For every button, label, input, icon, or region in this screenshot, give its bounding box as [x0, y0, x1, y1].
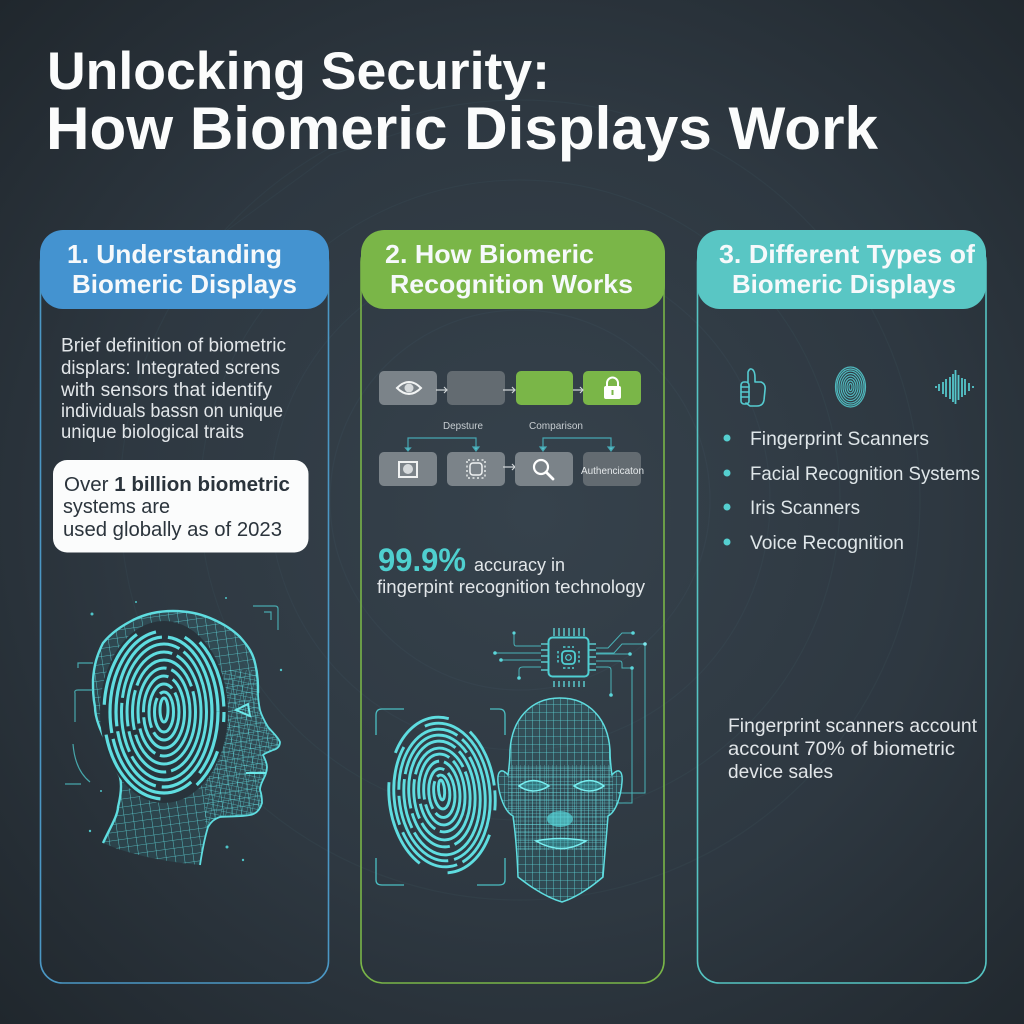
panel 1 definition text: individuals bassn on unique: [61, 401, 283, 422]
teal connectors: [406, 438, 614, 451]
stat: fingerprint scanners share: Fingerprint scanners account: [728, 715, 978, 737]
panel 1 definition text: unique biological traits: [61, 422, 244, 443]
box: camera: [379, 452, 437, 486]
panel 1 definition text: displars: Integrated screns: [61, 358, 280, 379]
head fingerprint rings: [104, 625, 224, 799]
panel 1 definition text: Brief definition of biometric: [61, 336, 286, 356]
panel 1 header: 1. Understanding: [67, 239, 282, 269]
illustration: head profile with fingerprint: [65, 597, 290, 870]
flow diagram: [379, 371, 644, 486]
title: Unlocking Security:: [47, 42, 550, 101]
icon: thumb: [741, 369, 765, 406]
bullet list: Facial Recognition Systems: [750, 463, 980, 485]
panel 3 header: Biomeric Displays: [732, 269, 956, 299]
callout: 1 billion systems: used globally as of 2023: [63, 519, 282, 541]
panel 2 header: Recognition Works: [390, 269, 633, 299]
box: lock: [583, 371, 641, 405]
stat: fingerprint scanners share: account 70% of biometric: [728, 738, 955, 760]
illustration: mesh face: [497, 697, 623, 903]
box: green step: [516, 371, 573, 405]
box: chip: [447, 452, 505, 486]
fingerprint rings: [382, 713, 502, 877]
panel: different types of biomeric displays: [697, 230, 986, 983]
stat: 99.9% accuracy: 99.9%: [378, 542, 466, 578]
scan corner marks: [65, 606, 278, 784]
icon: sound wave: [936, 370, 973, 404]
title: [46, 42, 879, 162]
panel: understanding biomeric displays: [40, 230, 329, 983]
arrow to magnifier: [503, 464, 515, 470]
arrows between top boxes: [436, 387, 583, 393]
callout: 1 billion systems: systems are: [63, 496, 170, 518]
box: authentication: Authencicaton: [581, 466, 644, 477]
panel 1 header: Biomeric Displays: [72, 269, 297, 299]
callout: 1 billion systems: [53, 460, 308, 552]
scan frame: [376, 709, 505, 885]
bullet list: Iris Scanners: [750, 497, 860, 519]
label: comparison: Comparison: [529, 420, 583, 432]
stat: 99.9% accuracy: accuracy in: [474, 555, 565, 575]
panel: how biomeric recognition works: [361, 230, 665, 983]
callout: 1 billion systems: Over 1 billion biometric: [64, 474, 290, 496]
panel 2 header: [361, 230, 665, 309]
scattered data dots: [89, 597, 282, 861]
box: authentication: [581, 452, 644, 486]
panel 1 definition text: with sensors that identify: [60, 380, 273, 401]
bullet list: Voice Recognition: [750, 532, 904, 554]
label: depsture: Depsture: [443, 420, 483, 432]
icon: fingerprint: [836, 367, 866, 407]
nose and lip highlights: [236, 704, 266, 773]
box: eye: [379, 371, 437, 405]
panel 1 header: [40, 230, 329, 309]
bullet list: [724, 428, 980, 554]
illustration: fingerprint in scan frame: [376, 709, 505, 885]
face features: [519, 780, 604, 848]
panel 2 header: 2. How Biomeric: [385, 239, 594, 269]
panel 1 definition text: [60, 336, 286, 443]
box: magnifier: [515, 452, 573, 486]
title: How Biomeric Displays Work: [46, 95, 879, 162]
stat: 99.9% accuracy: [377, 542, 646, 597]
panel 3 header: [697, 230, 986, 309]
bullet list: Fingerprint Scanners: [750, 428, 929, 450]
stat: fingerprint scanners share: device sales: [728, 761, 833, 783]
stat: fingerprint scanners share: [728, 715, 978, 783]
illustration: chip: [493, 628, 647, 803]
box: blank step: [447, 371, 505, 405]
stat: 99.9% accuracy: fingerpint recognition technology: [377, 576, 646, 597]
panel 3 header: 3. Different Types of: [719, 239, 975, 269]
